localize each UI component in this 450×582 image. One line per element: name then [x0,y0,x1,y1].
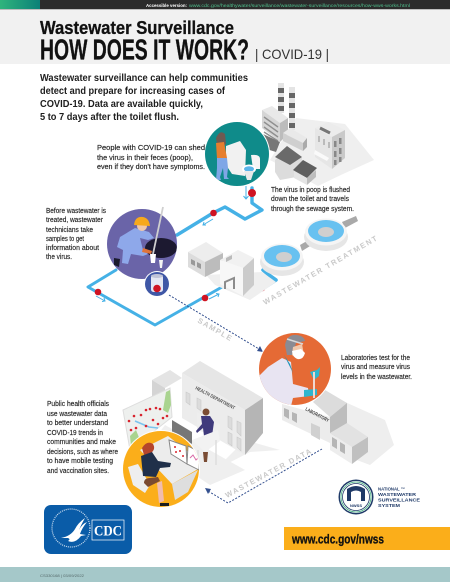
white processing block [220,250,254,296]
text: flushed down the toilet: down the toilet and travels [271,196,349,203]
data map board [123,388,172,450]
text: public health officials: decisions, such as where [47,449,118,456]
logo: NWSS: NWSS [350,503,362,508]
text: technicians take samples [46,208,106,261]
text: public health officials: Public health officials [47,401,109,408]
toilet [251,155,260,169]
logo: NWSS: NATIONAL ™ [378,486,405,492]
city: factory and houses [262,83,374,186]
text: public health officials: to have mobile testing [47,458,113,465]
manhole [145,238,177,258]
sample jar [144,271,170,297]
woman [216,132,226,145]
intro text: detect and prepare for increasing cases of [40,86,225,97]
logo: NWSS [338,480,420,514]
sewage pipe [88,188,276,325]
text: public health officials: to better understand [47,420,108,427]
intro text: Wastewater surveillance can help communities [40,73,248,84]
laboratory building [282,390,394,465]
head [285,335,305,355]
sampling pole [153,207,163,254]
monitors [169,440,187,464]
text: public health officials: use wastewater data [47,411,107,418]
intro text [40,73,248,123]
arrow: sample to laboratory [169,295,263,352]
back wing [152,370,182,388]
website banner [284,527,450,550]
lab coat [257,358,309,406]
text: technicians take samples: technicians take [46,227,93,234]
website banner: www.cdc.gov/nwss [291,532,384,546]
chimneys [278,83,295,130]
text: technicians take samples: the virus. [46,254,72,261]
text: technicians take samples: treated, wastewater [46,217,104,224]
building sign: LABORATORY [304,406,330,424]
logo: NWSS: WASTEWATER [378,492,417,497]
wastewater treatment plant [188,216,358,300]
flow arrows [96,186,248,302]
accessible version bar [0,0,450,9]
houses [263,134,280,152]
text: people can shed the virus [97,145,205,171]
health department building [123,361,280,485]
logo: NWSS: SYSTEM [378,503,400,508]
text: technicians take samples: information about [46,245,99,252]
text: public health officials [47,401,118,475]
chair [128,464,150,493]
footer band [0,567,450,582]
text: laboratories: levels in the wastewater. [341,374,412,381]
apartment block [315,122,345,137]
seated colleague [172,408,220,465]
sink cabinet [226,141,246,176]
official [142,443,154,455]
logo: NWSS: SURVEILLANCE [378,498,420,502]
settling tanks [260,216,358,276]
panel: lab scientist [257,332,332,406]
technician [117,228,154,264]
text: flushed down the toilet [271,187,354,213]
text: people can shed the virus: even if they don't have symptoms. [97,164,205,171]
text: laboratories [341,355,412,381]
grey house [188,242,223,277]
text: technicians take samples: samples to get [46,236,84,243]
text: public health officials: COVID-19 trends in [47,430,103,437]
intro text: COVID-19. Data are available quickly, [40,99,203,110]
topic tag: | COVID-19 | [255,46,329,62]
arrow: laboratory to health department [205,449,322,503]
text: technicians take samples: Before wastewater is [46,208,106,215]
building sign: HEALTH DEPARTMENT [194,385,236,411]
accessible version bar: www.cdc.gov/healthywater/surveillance/wastewater-surveillance/resources/how-wws-works.html [189,3,410,8]
subtitle: HOW DOES IT WORK? [40,34,249,66]
text: people can shed the virus: the virus in their feces (poop), [97,155,193,162]
logo: CDC and HHS [44,505,132,554]
panel: technician at manhole [107,207,177,297]
text: flushed down the toilet: through the sewage system. [271,206,354,213]
text: public health officials: communities and make [47,439,116,446]
accessible version bar: Accessible version: [146,3,187,8]
label: wastewater treatment: WASTEWATER TREATMENT [262,234,379,307]
label: wastewater data: WASTEWATER DATA [224,446,313,500]
main block [182,361,263,410]
gloves [310,367,320,380]
logo: CDC and HHS: CDC [94,524,122,540]
text: public health officials: and vaccination sites. [47,468,109,475]
label: sample: SAMPLE [196,316,233,343]
header band [0,9,450,66]
footer band: CS330168 | 03/09/2022 [40,574,84,578]
intro text: 5 to 7 days after the toilet flush. [40,112,179,123]
text: flushed down the toilet: The virus in poop is flushed [271,187,350,194]
virus markers [95,189,265,301]
text: laboratories: virus and measure virus [341,364,410,371]
title: Wastewater Surveillance [40,18,234,38]
panel: public health official at desk [122,430,205,508]
text: people can shed the virus: People with COVID-19 can shed [97,145,205,152]
text: laboratories: Laboratories test for the [341,355,410,362]
desk [140,436,205,484]
panel: person at toilet [204,121,270,187]
